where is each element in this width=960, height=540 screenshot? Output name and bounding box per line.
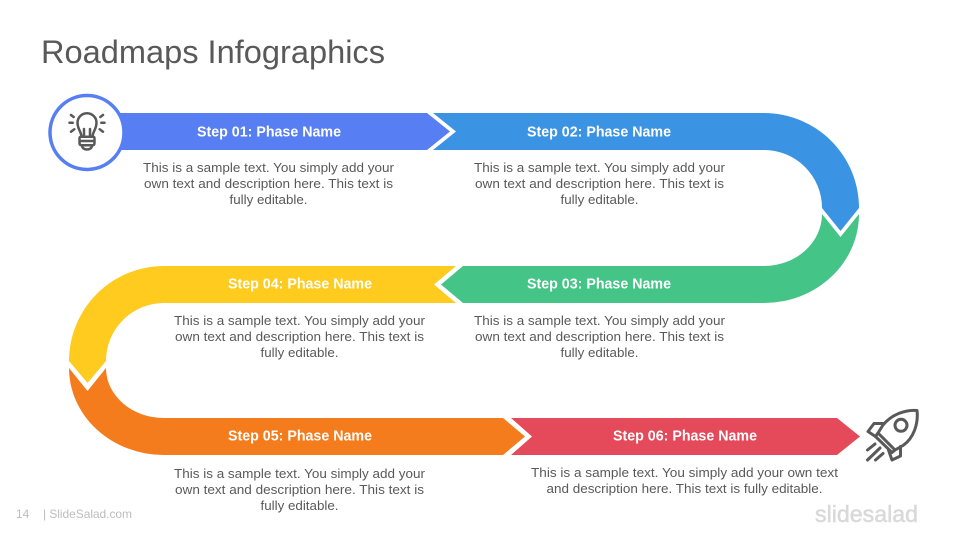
text block: step 04 description: own text and description here. This text is <box>175 329 425 344</box>
step 05: orange curved arrow: Step 05: Phase Name <box>228 428 372 444</box>
text block: step 03 description: This is a sample text. You simply add your <box>474 313 726 328</box>
step 01: blue arrow: Step 01: Phase Name <box>197 124 341 140</box>
footer: site name: | SlideSalad.com <box>43 507 132 521</box>
text block: step 05 description: own text and description here. This text is <box>175 482 425 497</box>
text block: step 03 description: own text and description here. This text is <box>475 329 725 344</box>
step 04: yellow curved arrow: Step 04: Phase Name <box>228 276 372 292</box>
text block: step 05 description: This is a sample text. You simply add your <box>174 466 426 481</box>
step 06: red arrow: Step 06: Phase Name <box>613 428 757 444</box>
title: Roadmaps Infographics <box>41 34 385 70</box>
text block: step 01 description: own text and description here. This text is <box>144 176 394 191</box>
step 04: yellow curved arrow <box>69 266 456 383</box>
step 02: sky blue curved arrow <box>433 113 859 231</box>
step 05: orange curved arrow <box>69 368 525 455</box>
footer: page number: 14 <box>16 507 30 521</box>
text block: step 01 description: fully editable. <box>230 192 308 207</box>
step 03: green curved arrow: Step 03: Phase Name <box>527 276 671 292</box>
text block: step 04 description: fully editable. <box>260 345 338 360</box>
text block: step 03 description: fully editable. <box>560 345 638 360</box>
text block: step 05 description: fully editable. <box>260 498 338 513</box>
text block: step 04 description: This is a sample text. You simply add your <box>174 313 426 328</box>
text block: step 02 description: own text and description here. This text is <box>475 176 725 191</box>
text block: step 02 description: This is a sample text. You simply add your <box>474 160 726 175</box>
text block: step 06 description: and description here. This text is fully editable. <box>546 481 822 496</box>
step 02: sky blue curved arrow: Step 02: Phase Name <box>527 124 671 140</box>
icon: light bulb in circle <box>50 96 124 170</box>
logo: slidesalad: slidesalad <box>815 501 918 527</box>
text block: step 01 description: This is a sample text. You simply add your <box>143 160 395 175</box>
step 06: red arrow <box>511 418 860 455</box>
step 03: green curved arrow <box>441 214 859 303</box>
text block: step 06 description: This is a sample text. You simply add your own text <box>531 465 838 480</box>
text block: step 02 description: fully editable. <box>560 192 638 207</box>
step 01: blue arrow <box>110 113 450 150</box>
icon: rocket <box>868 410 917 460</box>
